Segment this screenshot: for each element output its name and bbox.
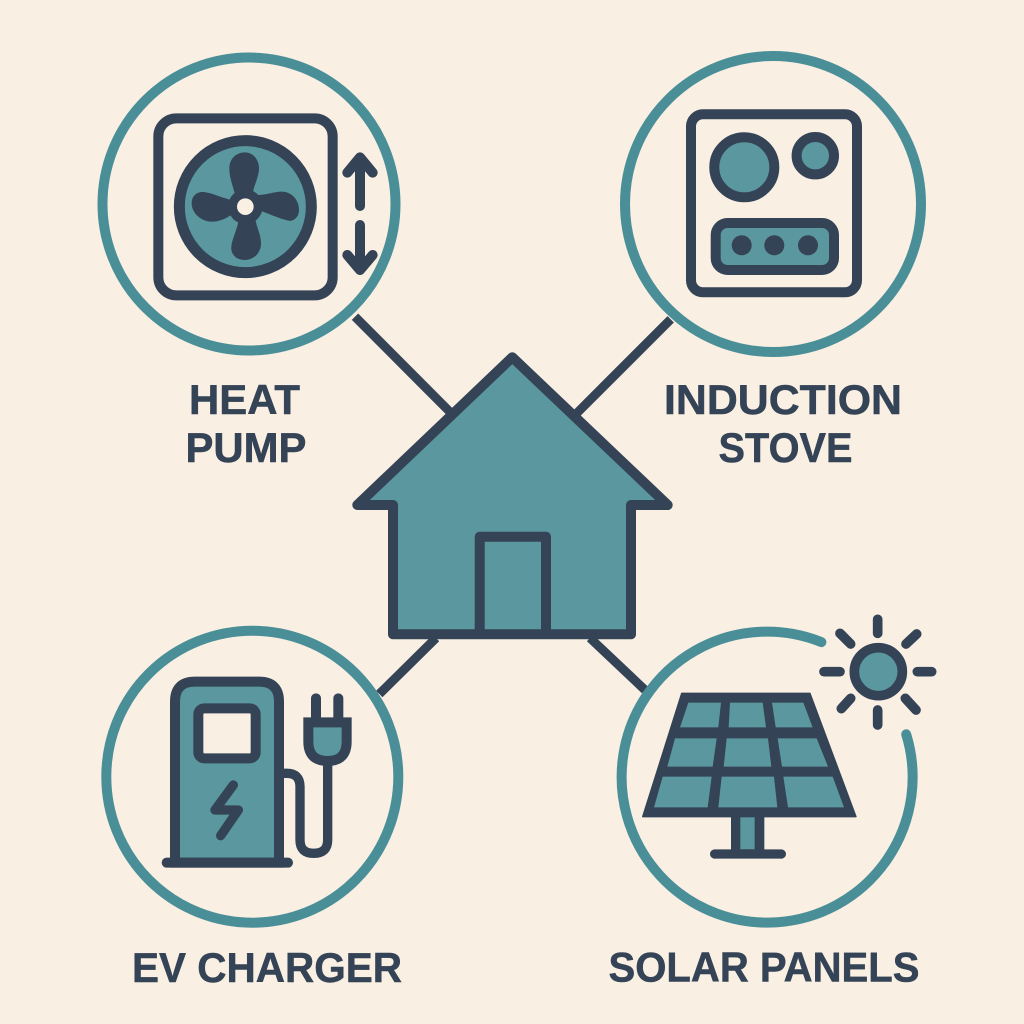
panel: ev charger [106, 631, 402, 991]
label: stove: STOVE [718, 424, 852, 471]
icon: solar panel [643, 693, 856, 859]
icon: sun [824, 619, 932, 725]
connector lines [355, 317, 671, 694]
icon: heat pump unit [158, 118, 373, 295]
panel: heat pump [102, 58, 396, 471]
label: ev charger: EV CHARGER [132, 944, 402, 991]
label: pump: PUMP [186, 424, 306, 471]
panel: solar panels [608, 619, 932, 990]
label: solar panels: SOLAR PANELS [608, 944, 920, 990]
ring: heat pump [102, 58, 396, 350]
label: induction: INDUCTION [664, 376, 902, 423]
panel: induction stove [625, 56, 921, 471]
icon: house [357, 357, 668, 634]
ring: solar panels [622, 632, 913, 923]
icon: charger [167, 682, 347, 863]
label: heat: HEAT [189, 376, 300, 423]
ring: induction stove [625, 56, 921, 352]
ring: ev charger [106, 631, 398, 923]
icon: stove [691, 114, 857, 292]
